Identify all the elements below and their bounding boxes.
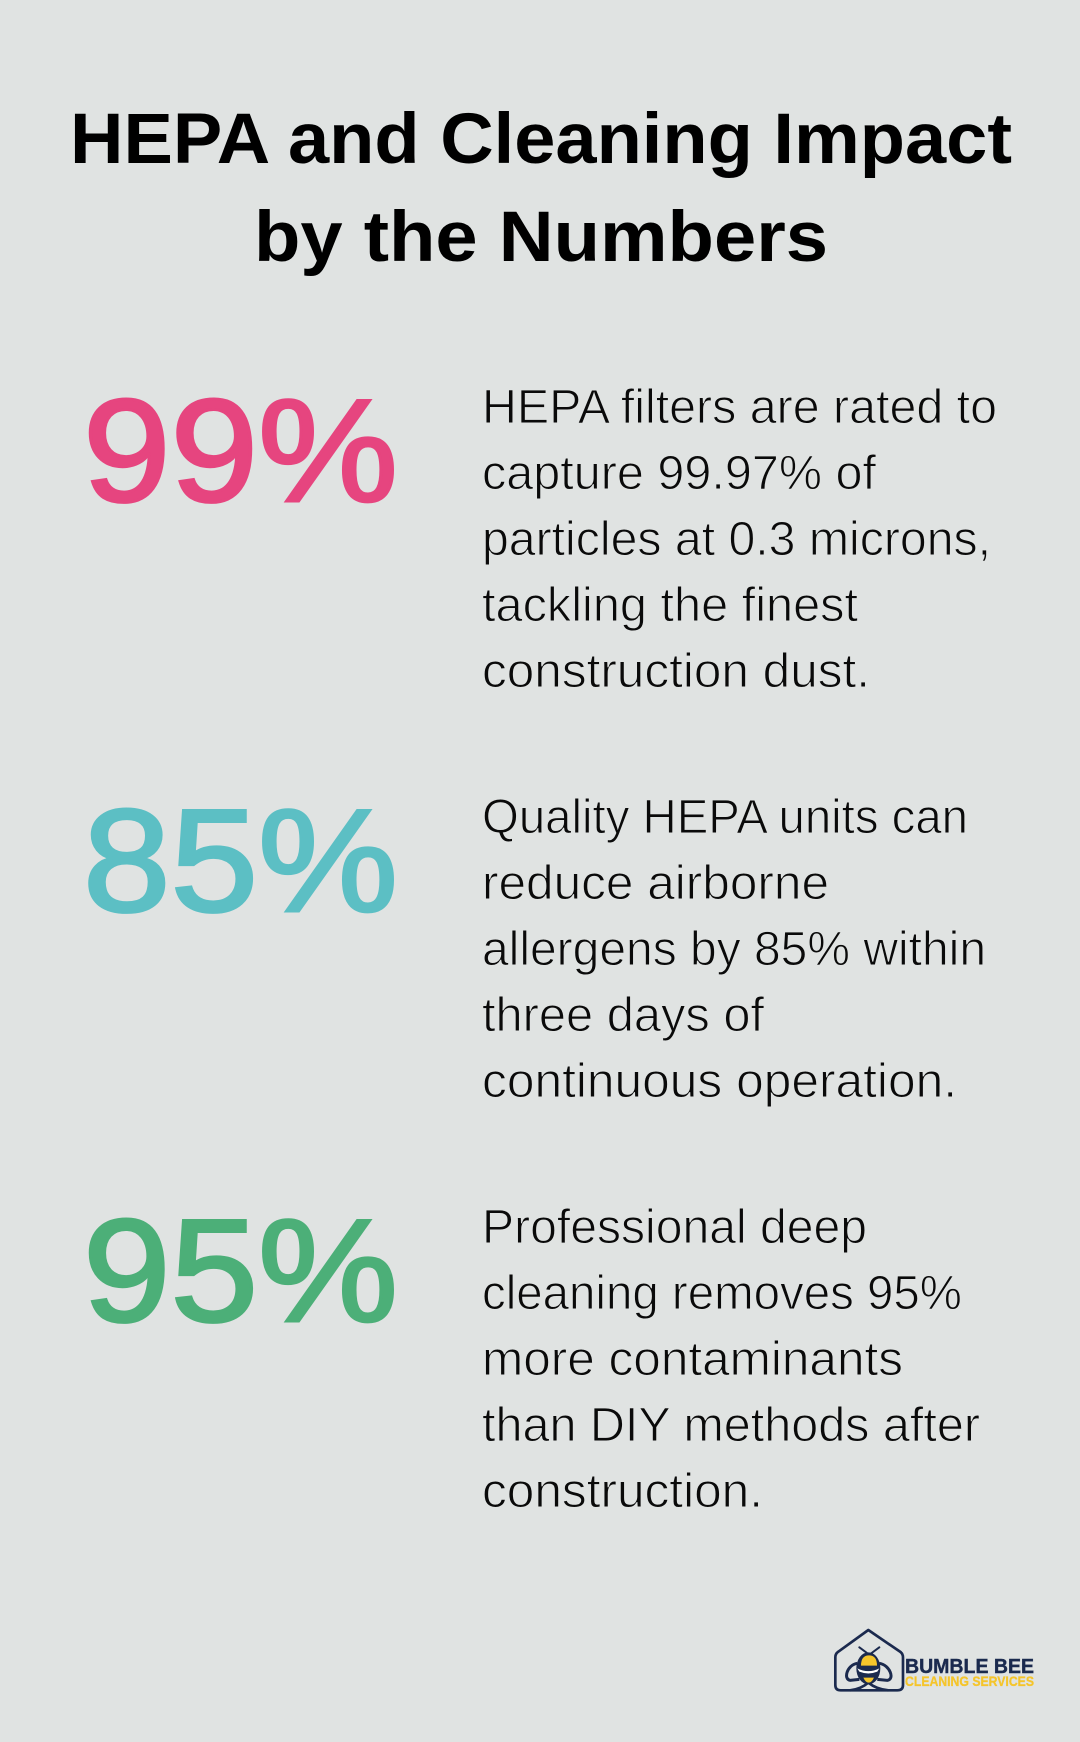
stat number: 99%: 99% bbox=[83, 369, 398, 532]
panel: stat 95% bbox=[83, 1189, 980, 1518]
panel: stat 99% bbox=[83, 369, 997, 698]
icon: bee in house bbox=[835, 1630, 903, 1690]
title bbox=[70, 100, 1012, 277]
title: by the Numbers bbox=[254, 198, 828, 277]
title: HEPA and Cleaning Impact bbox=[70, 100, 1012, 179]
text block: Quality HEPA units: allergens by 85% within bbox=[482, 923, 986, 976]
logo: Bumble Bee Cleaning Services bbox=[835, 1630, 1034, 1690]
text block: Quality HEPA units bbox=[482, 791, 986, 1108]
text block: HEPA filters: construction dust. bbox=[482, 645, 870, 698]
text block: Professional deep cleaning bbox=[482, 1201, 980, 1518]
text block: Professional deep cleaning: cleaning removes 95% bbox=[482, 1267, 962, 1320]
text block: HEPA filters: HEPA filters are rated to bbox=[482, 381, 997, 434]
logo wordmark bbox=[905, 1656, 1034, 1689]
stat number: 85%: 85% bbox=[83, 779, 398, 942]
text block: Quality HEPA units: reduce airborne bbox=[482, 857, 829, 910]
panel: stat 85% bbox=[83, 779, 986, 1108]
text block: Quality HEPA units: three days of bbox=[482, 989, 765, 1042]
text block: Professional deep cleaning: Professional deep bbox=[482, 1201, 867, 1254]
stat number: 95%: 95% bbox=[83, 1189, 398, 1352]
logo wordmark: CLEANING SERVICES bbox=[905, 1673, 1034, 1689]
text block: HEPA filters: capture 99.97% of bbox=[482, 447, 877, 500]
logo wordmark: BUMBLE BEE bbox=[905, 1656, 1034, 1678]
text block: Professional deep cleaning: than DIY methods after bbox=[482, 1399, 980, 1452]
text block: Quality HEPA units: continuous operation. bbox=[482, 1055, 957, 1108]
text block: HEPA filters: tackling the finest bbox=[482, 579, 858, 632]
text block: HEPA filters bbox=[482, 381, 997, 698]
text block: Professional deep cleaning: more contaminants bbox=[482, 1333, 903, 1386]
text block: HEPA filters: particles at 0.3 microns, bbox=[482, 513, 991, 566]
text block: Professional deep cleaning: construction. bbox=[482, 1465, 763, 1518]
text block: Quality HEPA units: Quality HEPA units can bbox=[482, 791, 968, 844]
